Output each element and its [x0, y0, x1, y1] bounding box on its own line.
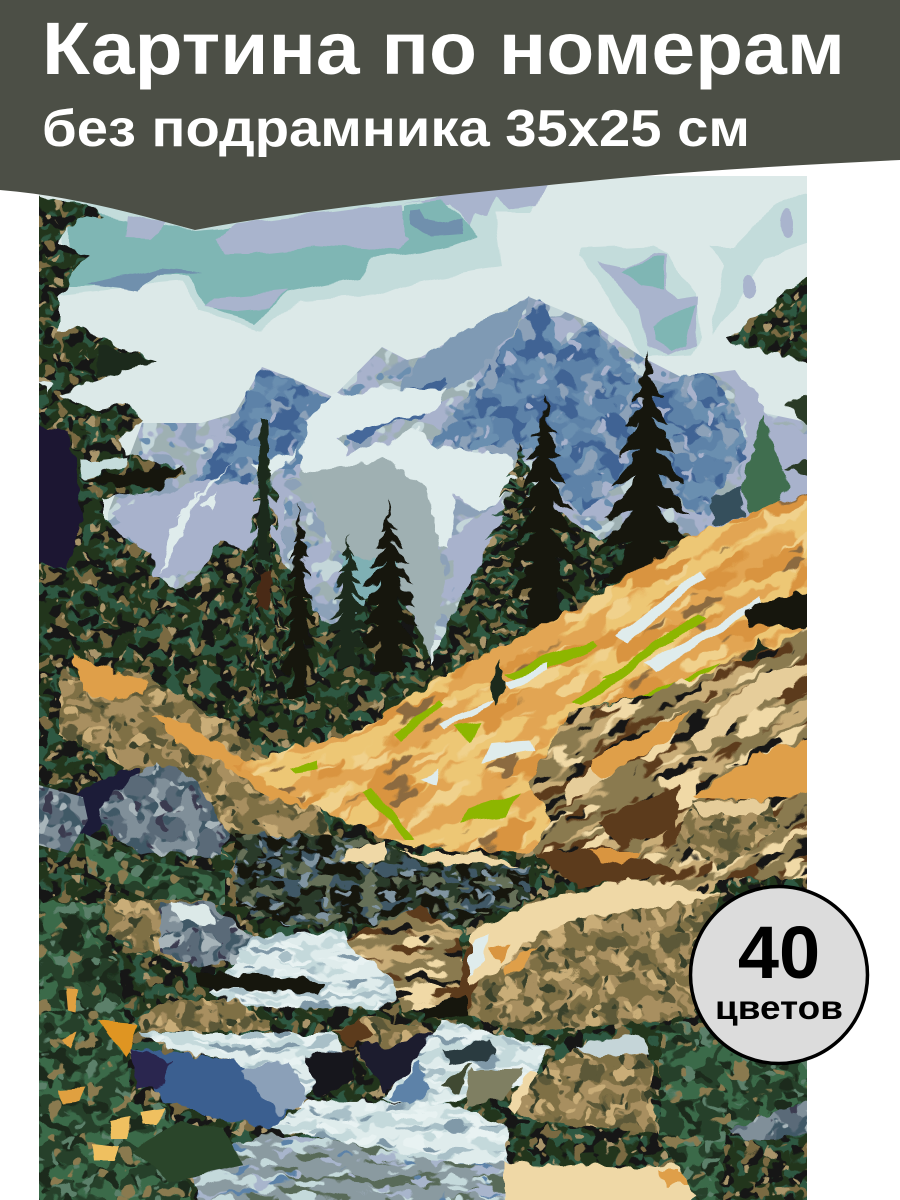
lime grass and pale streaks — [289, 571, 760, 840]
badge: 40 colours: цветов — [715, 989, 843, 1026]
spruce trees — [238, 348, 695, 705]
left lavender slope — [112, 480, 284, 580]
sky with clouds — [39, 176, 812, 676]
right waterfall — [382, 1020, 549, 1107]
olive brown undergrowth left — [58, 668, 332, 839]
dark foliage on hill edge — [490, 590, 830, 705]
left tall tree — [39, 196, 187, 681]
dark blue massif — [421, 300, 642, 513]
header banner — [0, 0, 900, 230]
title: Картина по номерам — [42, 7, 845, 90]
dark blue centre patch — [343, 380, 446, 445]
orange flowers — [60, 990, 245, 1180]
golden hillside — [232, 494, 807, 854]
forest mass — [20, 500, 830, 1200]
right range — [652, 373, 747, 515]
mountain range — [108, 297, 830, 660]
far green tree on the right — [740, 413, 789, 513]
left massif — [195, 370, 330, 485]
dark ravine centre — [235, 833, 529, 925]
snow — [300, 387, 510, 550]
rocky slope lower right — [398, 626, 807, 894]
water stream — [132, 930, 549, 1200]
left waterfall lip — [137, 1033, 345, 1110]
lower foliage — [20, 900, 830, 1200]
left orange grass strip — [73, 653, 313, 807]
grey boulders left — [20, 760, 228, 905]
right upper tree — [726, 276, 807, 476]
dark waterfall gaps — [304, 1047, 353, 1097]
badge: 40 colours: 40 — [738, 911, 820, 994]
upper ridge — [395, 297, 529, 395]
subtitle: без подрамника 35х25 см — [42, 100, 750, 158]
grey teal lower face — [284, 457, 446, 660]
blue pool — [132, 1047, 294, 1130]
rocks around stream — [103, 880, 830, 1200]
badge: 40 colours — [690, 886, 868, 1064]
painting: mountain landscape — [39, 176, 807, 1200]
